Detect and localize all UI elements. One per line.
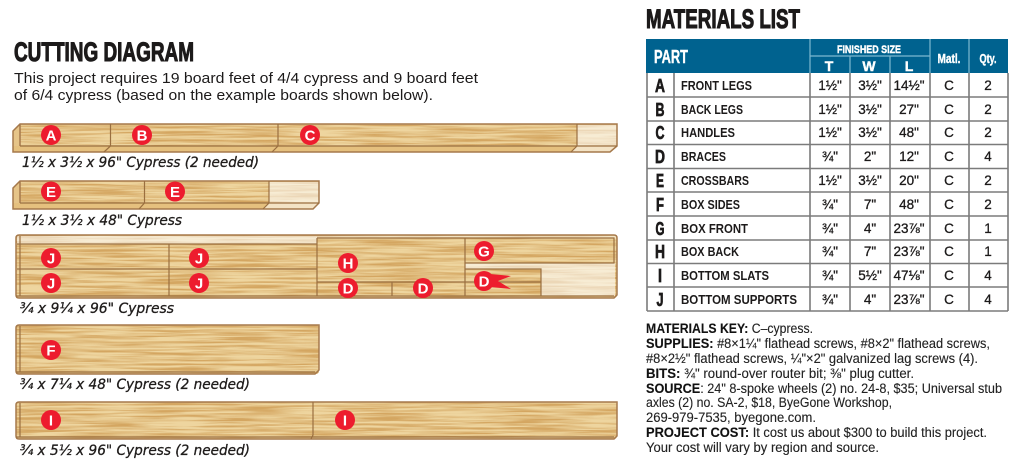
row I: 4 (984, 268, 992, 283)
row D: ¾" (822, 149, 838, 164)
row A: 2 (984, 78, 992, 93)
row E: C (944, 173, 954, 188)
materials notes (646, 321, 1002, 455)
board 4: box sides (16, 325, 319, 374)
part badge E: E (46, 184, 56, 201)
row B (656, 100, 992, 120)
part badge D: D (343, 280, 354, 298)
row E: E (656, 171, 664, 191)
row E (656, 171, 992, 191)
row J: 4 (984, 292, 992, 307)
row B: 27" (899, 102, 919, 117)
board 2: 48 inch crossbars (13, 181, 319, 209)
row I: ¾" (822, 268, 838, 283)
part badge E (165, 182, 185, 202)
row F: ¾" (822, 197, 838, 212)
row J: 23⅞" (893, 292, 925, 307)
row D: 12" (899, 149, 919, 164)
table header: Qty. (980, 51, 996, 66)
row E: CROSSBARS (681, 173, 749, 188)
row A: FRONT LEGS (681, 78, 752, 93)
row H (655, 242, 992, 262)
intro text (14, 71, 478, 104)
board 4 label: ¾ x 7¼ x 48" Cypress (2 needed) (20, 377, 250, 393)
row I: C (944, 268, 954, 283)
part badge C: C (305, 128, 316, 144)
row B: 3½" (858, 102, 882, 117)
part badge C (300, 125, 320, 145)
part badge I (335, 410, 355, 430)
row B: 2 (984, 102, 992, 117)
part badge H (338, 253, 358, 273)
row B: C (944, 102, 954, 117)
part badge J (189, 248, 209, 268)
row D: BRACES (681, 149, 726, 164)
row G: G (656, 219, 664, 239)
part badge J (41, 273, 61, 293)
row I (658, 266, 992, 286)
row B: BACK LEGS (681, 102, 743, 117)
row A: 3½" (858, 78, 882, 93)
table header: L (905, 58, 914, 74)
row I: I (658, 266, 662, 286)
board 3: wide board with J, H, G and D parts (16, 235, 617, 298)
row A (655, 76, 992, 96)
part badge B: B (137, 128, 148, 144)
materials notes: BITS: ¾" round-over router bit; ⅜" plug cutter. (646, 366, 914, 381)
materials notes: Your cost will vary by region and source. (646, 440, 879, 455)
part badge D (413, 278, 433, 298)
row D: 4 (984, 149, 992, 164)
part badge J (41, 248, 61, 268)
board 5: bottom slats (16, 402, 617, 439)
row C: 48" (899, 125, 919, 140)
part badge F: F (46, 342, 56, 360)
row C: C (944, 125, 954, 140)
part badge B (132, 125, 152, 145)
row H: ¾" (822, 244, 838, 259)
materials notes: SOURCE: 24" 8-spoke wheels (2) no. 24-8, $35; Universal stub (646, 381, 1002, 396)
materials notes: PROJECT COST: It cost us about $300 to build this project. (646, 425, 987, 440)
row E: 3½" (858, 173, 882, 188)
part badge I: I (343, 412, 347, 430)
row D (655, 147, 992, 167)
materials notes: axles (2) no. SA-2, $18, ByeGone Workshop, (646, 395, 892, 410)
row I: 47⅛" (893, 268, 925, 283)
row D: C (944, 149, 954, 164)
row F: F (656, 195, 664, 215)
row F: 48" (899, 197, 919, 212)
row G: 4" (864, 221, 876, 236)
row J: 4" (864, 292, 876, 307)
row G: 23⅞" (893, 221, 925, 236)
part badge J: J (195, 276, 203, 292)
row C: HANDLES (681, 125, 735, 140)
board 1: 96 inch handles and legs (13, 124, 617, 152)
row C: 1½" (818, 125, 842, 140)
part badge J: J (47, 276, 55, 292)
part badge E: E (170, 184, 180, 201)
part badge F (41, 340, 61, 360)
row H: H (655, 242, 665, 262)
row C (656, 123, 992, 143)
row D: D (655, 147, 665, 167)
materials notes: #8×2½" flathead screws, ¼"×2" galvanized lag screws (4). (646, 351, 978, 366)
row J: C (944, 292, 954, 307)
row E: 20" (899, 173, 919, 188)
heading: cutting diagram: CUTTING DIAGRAM (14, 37, 194, 67)
row C: 3½" (858, 125, 882, 140)
row A: 14½" (893, 78, 925, 93)
board 5 label: ¾ x 5½ x 96" Cypress (2 needed) (20, 443, 250, 459)
table header (646, 39, 1008, 74)
part badge J: J (195, 250, 203, 268)
part badge D with kerf arrows (474, 271, 511, 291)
materials table (646, 39, 1008, 311)
row I: BOTTOM SLATS (681, 268, 769, 283)
row F: BOX SIDES (681, 197, 740, 212)
row G: BOX FRONT (681, 221, 748, 236)
row G (656, 219, 992, 239)
row J: BOTTOM SUPPORTS (681, 292, 797, 307)
row E: 1½" (818, 173, 842, 188)
row F (656, 195, 992, 215)
part badge A (41, 125, 61, 145)
table header: PART (654, 47, 688, 67)
table header: FINISHED SIZE (837, 44, 901, 56)
intro text: of 6/4 cypress (based on the example boards shown below). (14, 88, 433, 104)
row H: BOX BACK (681, 244, 740, 259)
row F: C (944, 197, 954, 212)
part badge G (474, 241, 494, 261)
table header: W (862, 58, 876, 74)
row C: C (656, 123, 664, 143)
row J: J (656, 290, 664, 310)
row C: 2 (984, 125, 992, 140)
part badge D: D (418, 280, 429, 298)
board 1 label: 1½ x 3½ x 96" Cypress (2 needed) (22, 155, 259, 171)
row G: C (944, 221, 954, 236)
table header: Matl. (938, 51, 960, 66)
row A: A (655, 76, 665, 96)
row F: 2 (984, 197, 992, 212)
row A: C (944, 78, 954, 93)
row G: ¾" (822, 221, 838, 236)
materials notes: SUPPLIES: #8×1¼" flathead screws, #8×2" flathead screws, (646, 336, 990, 351)
part badge D (338, 278, 358, 298)
row B: 1½" (818, 102, 842, 117)
row G: 1 (984, 221, 992, 236)
row J (656, 290, 992, 310)
board 2 label: 1½ x 3½ x 48" Cypress (22, 213, 182, 229)
row H: C (944, 244, 954, 259)
row E: 2 (984, 173, 992, 188)
board 3 label: ¾ x 9¼ x 96" Cypress (20, 301, 174, 317)
materials notes: 269-979-7535, byegone.com. (646, 410, 816, 425)
row D: 2" (864, 149, 876, 164)
row F: 7" (864, 197, 876, 212)
part badge I: I (49, 412, 53, 430)
intro text: This project requires 19 board feet of 4/4 cypress and 9 board feet (14, 71, 478, 87)
row J: ¾" (822, 292, 838, 307)
heading: materials list: MATERIALS LIST (646, 4, 800, 34)
part badge G: G (478, 244, 490, 260)
part badge A: A (46, 128, 57, 144)
part badge D with kerf arrows: D (479, 274, 490, 290)
part badge J: J (47, 250, 55, 268)
row H: 1 (984, 244, 992, 259)
table header: T (825, 58, 834, 74)
part badge E (41, 182, 61, 202)
row A: 1½" (818, 78, 842, 93)
row H: 23⅞" (893, 244, 925, 259)
part badge J (189, 273, 209, 293)
part badge I (41, 410, 61, 430)
row I: 5½" (858, 268, 882, 283)
row B: B (656, 100, 664, 120)
row H: 7" (864, 244, 876, 259)
part badge H: H (343, 256, 353, 272)
materials notes: MATERIALS KEY: C–cypress. (646, 321, 813, 336)
